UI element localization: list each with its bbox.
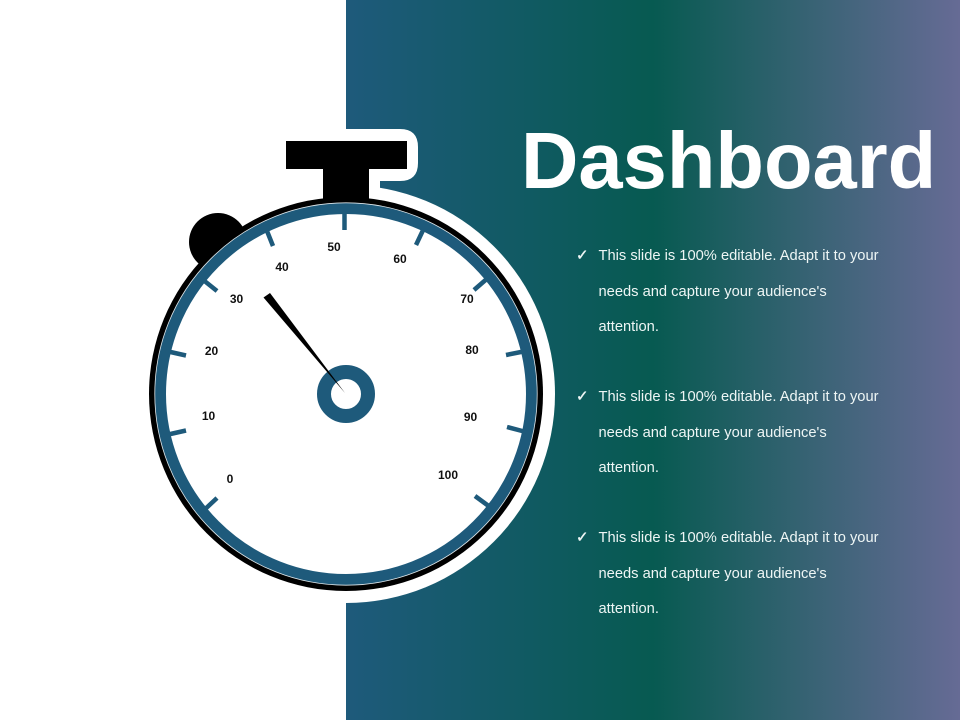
bullet text 3: needs and capture your audience's — [598, 566, 827, 582]
side knob — [189, 213, 247, 271]
bullet text 3 — [576, 528, 879, 617]
dial numbers: 70 — [460, 292, 474, 306]
dial numbers: 10 — [202, 409, 215, 423]
bullet text 3: ✓ — [576, 528, 589, 546]
gradient background panel — [346, 0, 960, 720]
dial numbers: 100 — [438, 468, 458, 482]
crown button — [286, 141, 407, 207]
bullet text 3: This slide is 100% editable. Adapt it to your — [598, 530, 879, 546]
dial numbers: 40 — [275, 260, 289, 274]
gauge needle — [264, 293, 345, 393]
bullet text 3: attention. — [598, 601, 659, 617]
dial numbers: 80 — [465, 343, 479, 357]
dial numbers: 50 — [327, 240, 341, 254]
bullet text 2: This slide is 100% editable. Adapt it to your — [598, 389, 879, 405]
bullet text 2: attention. — [598, 460, 659, 476]
bullet text 2 — [576, 387, 879, 476]
bullet text 2: ✓ — [576, 387, 589, 405]
bullet text 2: needs and capture your audience's — [598, 425, 827, 441]
dial numbers: 30 — [230, 292, 243, 306]
tick marks — [166, 212, 526, 512]
bullet text 1 — [576, 246, 879, 335]
bullet text 1: attention. — [598, 319, 659, 335]
blue dial ring — [160, 208, 532, 580]
bullet text 1: This slide is 100% editable. Adapt it to your — [598, 248, 879, 264]
dial numbers: 90 — [464, 410, 477, 424]
title: Dashboard — [521, 116, 936, 205]
gauge hub — [324, 372, 368, 416]
dial numbers: 60 — [393, 252, 407, 266]
dial numbers: 20 — [205, 344, 218, 358]
outer black ring — [149, 197, 543, 591]
bullet text 1: ✓ — [576, 246, 589, 264]
stopwatch white outline — [137, 129, 555, 603]
dial numbers — [202, 240, 479, 486]
bullet text 1: needs and capture your audience's — [598, 284, 827, 300]
thin white ring line — [155, 203, 537, 585]
dial numbers: 0 — [227, 472, 234, 486]
